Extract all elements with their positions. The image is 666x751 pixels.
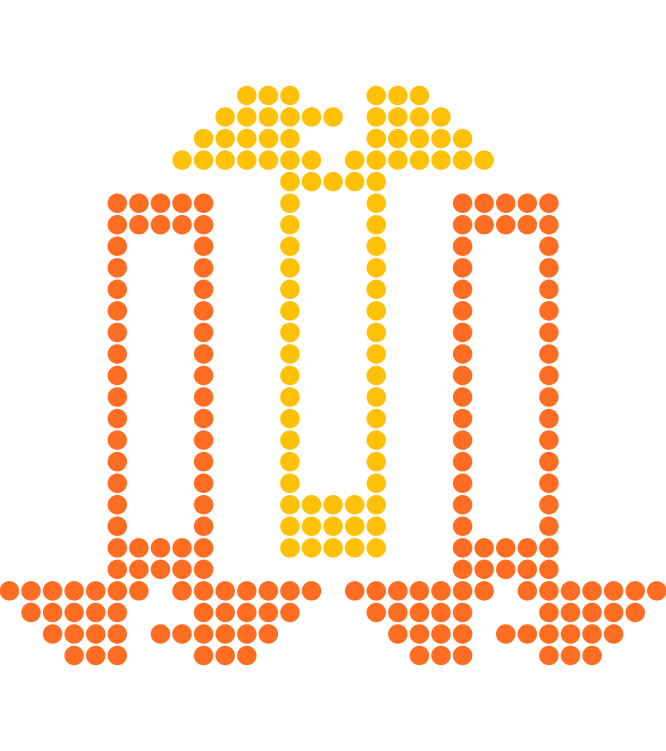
orange left base: outer wing (9, 591, 140, 656)
orange left structure (9, 203, 313, 656)
yellow roof: right wing (355, 96, 485, 160)
orange left column (117, 203, 205, 569)
yellow central column (290, 182, 377, 548)
yellow central structure (182, 96, 485, 548)
orange right column (463, 203, 550, 569)
yellow roof: left wing (182, 96, 334, 160)
orange left base: inner wing (160, 591, 313, 656)
orange right base: inner wing (355, 591, 485, 656)
orange right base: outer wing (506, 591, 658, 656)
orange right structure (355, 203, 658, 656)
